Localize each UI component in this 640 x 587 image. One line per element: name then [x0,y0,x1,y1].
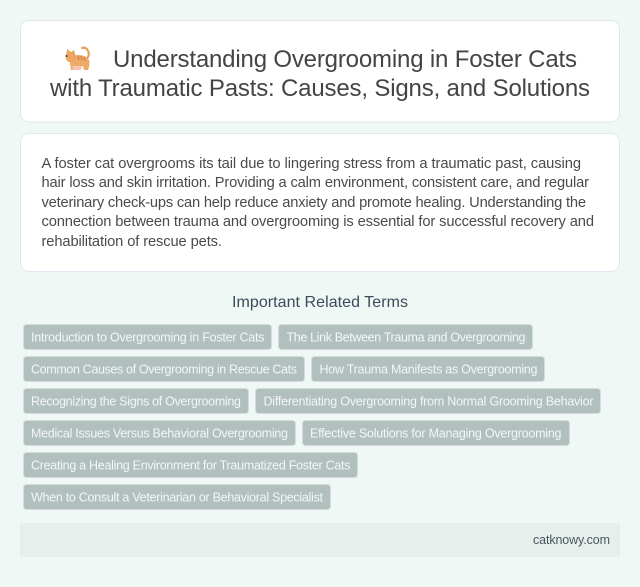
panel: description [20,134,620,272]
tag: recognizing signs [24,388,248,414]
panel: title header [20,20,620,122]
tag: when to consult [24,484,330,510]
title text [49,46,590,102]
tag: effective solutions: Effective Solutions for Managing Overgrooming [310,426,562,440]
tag: common causes: Common Causes of Overgrooming in Rescue Cats [31,362,297,376]
footer source text: catknowy.com [533,533,610,547]
description text [42,156,594,250]
tag: medical versus behavioral: Medical Issues Versus Behavioral Overgrooming [31,426,288,440]
tag list: related terms [24,324,600,510]
tag: introduction: Introduction to Overgrooming in Foster Cats [31,330,264,344]
description text: veterinary check-ups can help reduce anxiety and promote healing. Understanding the [42,195,586,211]
description text: hair loss and skin irritation. Providing a calm environment, consistent care, and regular [42,175,589,191]
heading: important related terms: Important Related Terms [232,294,408,311]
tag: healing environment [24,452,358,478]
tag: when to consult: When to Consult a Veterinarian or Behavioral Specialist [31,490,324,504]
icon: orange cat [66,48,89,70]
tag: trauma link: The Link Between Trauma and Overgrooming [286,330,526,344]
tag: trauma manifests: How Trauma Manifests as Overgrooming [320,362,538,376]
description text: connection between trauma and overgrooming is essential for successful recovery and [42,214,594,230]
tag: trauma manifests [312,356,544,382]
tag: common causes [24,356,304,382]
tag: differentiating: Differentiating Overgrooming from Normal Grooming Behavior [264,394,594,408]
footer [20,523,620,557]
description text: A foster cat overgrooms its tail due to lingering stress from a traumatic past, causing [42,156,581,172]
title text: Understanding Overgrooming in Foster Cats [113,46,577,73]
tag: medical versus behavioral [24,420,296,446]
title text: with Traumatic Pasts: Causes, Signs, and Solutions [49,75,590,102]
tag: effective solutions [302,420,570,446]
tag: differentiating [256,388,600,414]
tag: trauma link [278,324,532,350]
tag: introduction [24,324,272,350]
tag: recognizing signs: Recognizing the Signs of Overgrooming [31,394,241,408]
description text: rehabilitation of rescue pets. [42,234,222,250]
tag: healing environment: Creating a Healing Environment for Traumatized Foster Cats [31,458,350,472]
